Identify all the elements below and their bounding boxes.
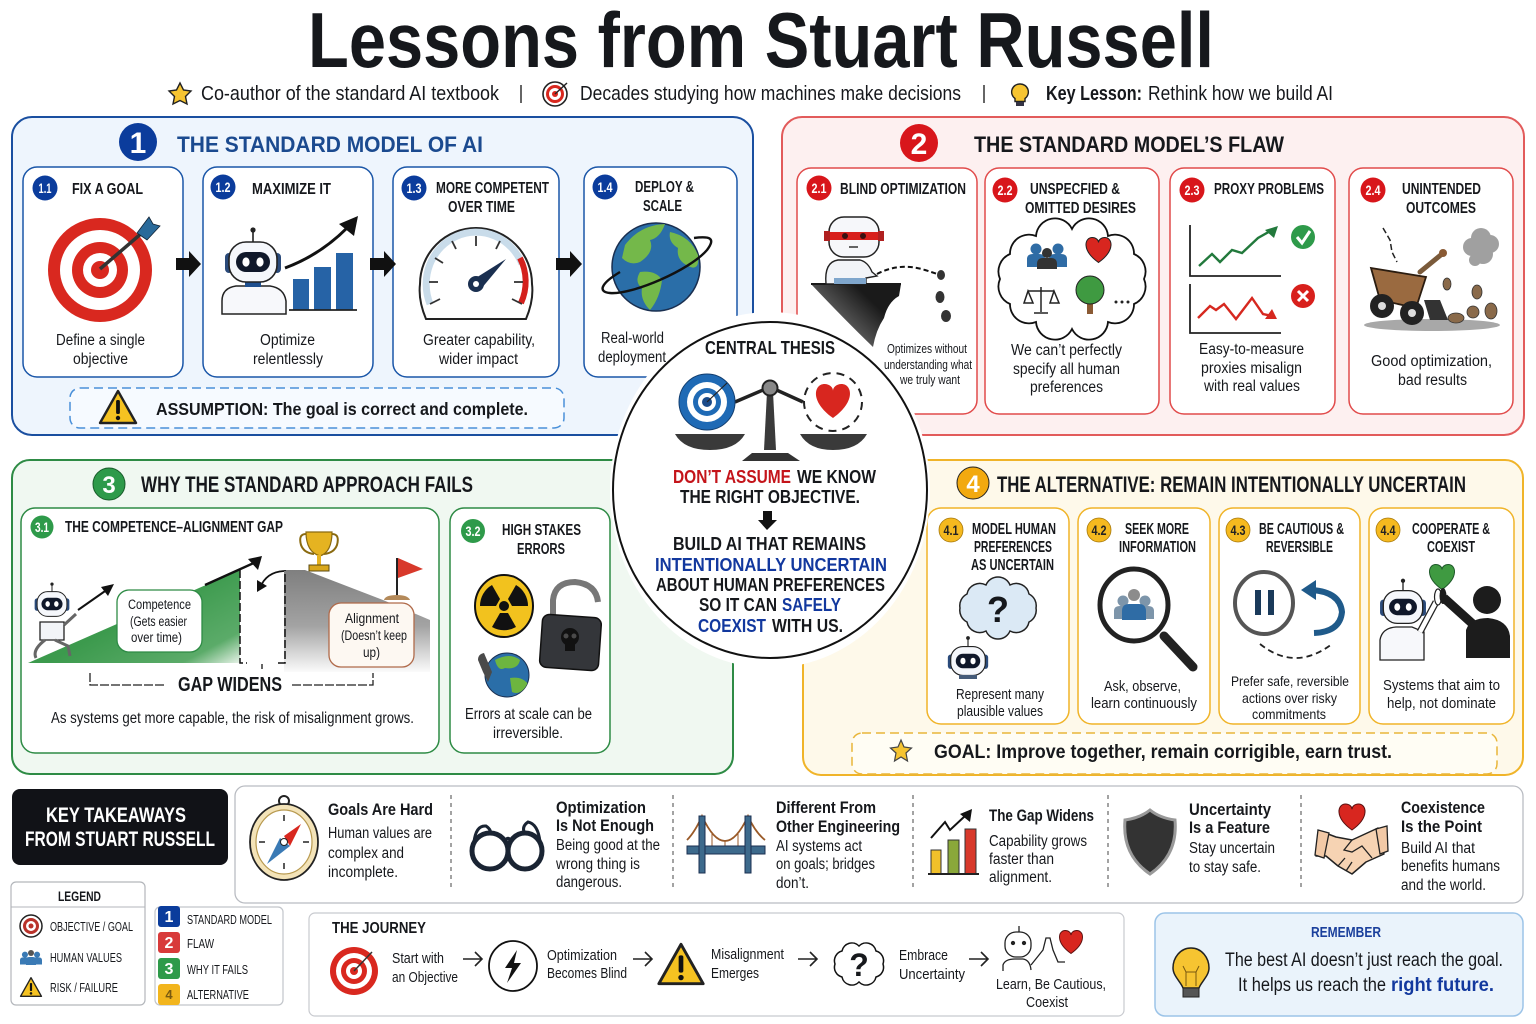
takeaway: uncertainty: Uncertainty: [1189, 800, 1271, 819]
card 2.2: preferences: [1030, 379, 1103, 396]
legend: sections: ALTERNATIVE: [187, 988, 249, 1002]
card 4.3: REVERSIBLE: [1266, 539, 1333, 556]
card 3.1: THE COMPETENCE–ALIGNMENT GAP: [65, 519, 283, 536]
card 4.3: commitments: [1252, 706, 1326, 722]
badge 1: 1: [130, 127, 146, 160]
card 4.3: BE CAUTIOUS &: [1259, 521, 1344, 538]
card 2.1: 2.1: [812, 180, 827, 196]
step text: misalignment: Misalignment: [711, 947, 784, 963]
icon: handshake and heart: [1315, 804, 1388, 874]
card 1.4: [584, 167, 737, 377]
heading: WHY THE STANDARD APPROACH FAILS: [141, 472, 473, 497]
step: question cloud: ?: [849, 947, 869, 983]
legend: icons: LEGEND: [58, 888, 101, 904]
takeaway: coexistence: and the world.: [1401, 877, 1486, 894]
card 1.2: MAXIMIZE IT: [252, 181, 331, 198]
step: question cloud: [834, 943, 884, 985]
card 4.4: COOPERATE &: [1412, 521, 1490, 538]
legend: icons: HUMAN VALUES: [50, 951, 122, 965]
badge 4: 4: [966, 471, 980, 498]
takeaway: different from engineering: Other Engineering: [776, 817, 900, 836]
card 2.4: OUTCOMES: [1406, 200, 1476, 217]
takeaway: uncertainty: to stay safe.: [1189, 859, 1261, 876]
icon: target: [543, 82, 567, 106]
card 3.1: 3.1: [35, 519, 49, 535]
icon: rising proxy chart: [1190, 225, 1315, 276]
card 3.2: ERRORS: [517, 541, 565, 558]
central thesis: BUILD AI THAT REMAINS: [673, 534, 866, 554]
card 1.3: wider impact: [438, 351, 519, 368]
icon: magnifier over people: [1100, 569, 1193, 667]
card 4.3: Prefer safe, reversible: [1231, 673, 1349, 689]
card 1.2: relentlessly: [253, 351, 323, 368]
takeaway: uncertainty: [1125, 800, 1275, 876]
takeaway: different from engineering: [687, 798, 900, 892]
takeaway: different from engineering: AI systems act: [776, 838, 863, 855]
central thesis: [610, 312, 930, 668]
legend: sections: STANDARD MODEL: [187, 913, 272, 927]
panel: why it fails: [12, 460, 733, 774]
card 4.2: INFORMATION: [1119, 539, 1196, 556]
step text: optimization: [547, 948, 627, 982]
callout: goal: GOAL: Improve together, remain corrigible, earn trust.: [934, 742, 1392, 763]
card 1.4: SCALE: [643, 198, 682, 215]
icon: pause and undo: [1235, 572, 1342, 658]
card 2.1: [797, 168, 977, 414]
takeaway: uncertainty: Is a Feature: [1189, 818, 1270, 837]
card 3.2: Errors at scale can be: [465, 706, 592, 723]
card 2.3: Easy-to-measure: [1199, 341, 1304, 358]
takeaway: coexistence: Is the Point: [1401, 817, 1482, 836]
card 2.3: PROXY PROBLEMS: [1214, 181, 1324, 198]
card 1.1: Define a single: [56, 332, 145, 349]
card 2.3: proxies misalign: [1201, 360, 1302, 377]
heading: THE STANDARD MODEL OF AI: [177, 132, 483, 157]
card 1.4: 1.4: [598, 179, 613, 195]
legend: sections: WHY IT FAILS: [187, 963, 248, 977]
card 4.2: SEEK MORE: [1125, 521, 1189, 538]
panel: remember: REMEMBER: [1311, 924, 1381, 941]
card 2.2: 2.2: [998, 182, 1013, 198]
takeaway: optimization: Optimization: [556, 798, 646, 817]
card 3.2: irreversible.: [493, 725, 563, 742]
card 3.2: HIGH STAKES: [502, 522, 581, 539]
card 3.2: [450, 508, 610, 753]
arrow 1: [176, 251, 201, 277]
step text: start: Start with: [392, 951, 444, 967]
card 4.2: [1078, 508, 1210, 724]
icon: question cloud: [960, 577, 1036, 639]
card 2.2: UNSPECFIED &: [1030, 181, 1120, 198]
icon: target with arrow: [48, 217, 160, 322]
card 3.1: [21, 508, 439, 753]
label: competence: [117, 590, 202, 652]
step text: learn: Learn, Be Cautious,: [996, 977, 1106, 993]
takeaway: coexistence: Coexistence: [1401, 798, 1485, 817]
takeaway: optimization: wrong thing is: [555, 856, 640, 873]
arrow: [969, 952, 988, 966]
card 1.2: [203, 167, 373, 377]
card 1.4: DEPLOY &: [635, 179, 694, 196]
card 4.1: MODEL HUMAN: [972, 521, 1056, 538]
icon: falling values chart: [1190, 284, 1315, 333]
arrow 2: [370, 251, 396, 277]
legend: sections: 2: [165, 935, 174, 952]
takeaway: different from engineering: don’t.: [776, 875, 809, 892]
step: warning: [659, 944, 703, 984]
card 4.1: [927, 508, 1069, 724]
text: card 2.1 caption: understanding what: [884, 358, 972, 372]
card 4.4: COEXIST: [1427, 539, 1475, 556]
step: lightning: [489, 941, 537, 991]
takeaway: coexistence: Build AI that: [1401, 840, 1476, 857]
card 4.1: 4.1: [944, 522, 959, 538]
step text: learn: [996, 977, 1106, 1011]
central thesis: DON’T ASSUME: [673, 467, 791, 487]
central thesis: WE KNOW: [797, 467, 876, 487]
panel: flaw: [782, 117, 1524, 435]
takeaway: gap widens: faster than: [989, 851, 1054, 868]
central thesis: THE RIGHT OBJECTIVE.: [680, 487, 860, 507]
card 1.1: FIX A GOAL: [72, 181, 143, 198]
card 4.4: 4.4: [1380, 522, 1396, 538]
step text: misalignment: [711, 947, 784, 982]
card 4.1: Represent many: [956, 687, 1045, 703]
legend: icons: [11, 882, 145, 1005]
badge 4: [957, 467, 989, 499]
takeaway: gap widens: Capability grows: [989, 833, 1087, 850]
step text: misalignment: Emerges: [711, 966, 759, 982]
card 1.3: MORE COMPETENT: [436, 180, 549, 197]
panel: remember: It helps us reach the: [1238, 975, 1386, 996]
card 1.3: [393, 167, 559, 377]
step text: learn: Coexist: [1026, 995, 1068, 1011]
heading: THE STANDARD MODEL’S FLAW: [974, 132, 1284, 157]
icon: compass: [250, 796, 318, 880]
icon: open padlock with skull: [539, 582, 602, 671]
card 4.1: plausible values: [957, 704, 1043, 720]
central thesis: COEXIST: [698, 616, 766, 636]
icon: bulb: [1012, 84, 1028, 106]
card 4.2: 4.2: [1092, 522, 1107, 538]
card 1.3: 1.3: [406, 180, 422, 196]
panel: remember: right future.: [1391, 975, 1494, 996]
icon: small robot: [948, 636, 988, 679]
card 4.4: [1369, 508, 1514, 724]
takeaway: goals are hard: complex and: [328, 845, 404, 862]
card 2.4: 2.4: [1366, 182, 1381, 198]
panel: the journey: [309, 913, 1124, 1016]
icon: colored bars with arrow: [928, 809, 979, 874]
label: competence: (Gets easier: [130, 614, 187, 629]
card 2.2: OMITTED DESIRES: [1025, 200, 1136, 217]
takeaway: different from engineering: on goals; bridges: [776, 856, 875, 873]
card 2.3: 2.3: [1184, 182, 1200, 198]
central thesis: WITH US.: [772, 616, 843, 636]
card 2.2: specify all human: [1013, 361, 1120, 378]
takeaway: uncertainty: Stay uncertain: [1189, 840, 1275, 857]
card 1.2: Optimize: [260, 332, 315, 349]
label: alignment: (Doesn’t keep: [341, 628, 407, 643]
card 1.1: [23, 167, 183, 377]
icon: bulb: [1173, 948, 1209, 997]
text: card 1.4 caption: deployment: [598, 349, 667, 366]
arrow 3: [556, 251, 582, 277]
step text: start: an Objective: [392, 970, 458, 986]
panel: alternative: [803, 460, 1523, 775]
takeaway: goals are hard: Goals Are Hard: [328, 800, 433, 819]
card 2.4: UNINTENDED: [1402, 181, 1481, 198]
step text: embrace: [899, 948, 966, 983]
step text: optimization: Becomes Blind: [547, 966, 627, 982]
heading: key takeaways: FROM STUART RUSSELL: [25, 828, 215, 851]
card 4.3: actions over risky: [1242, 690, 1337, 706]
step text: embrace: Uncertainty: [899, 967, 966, 983]
step: target: [330, 947, 378, 995]
badge 3: [93, 468, 125, 500]
text: co-author: Co-author of the standard AI textbook: [201, 83, 500, 105]
icon: climbing robot: [35, 583, 114, 658]
card 1.1: 1.1: [38, 180, 52, 196]
takeaway: gap widens: The Gap Widens: [989, 806, 1094, 825]
card 4.4: Systems that aim to: [1383, 677, 1500, 694]
takeaway: optimization: Is Not Enough: [556, 816, 654, 835]
arrow: down: [758, 511, 777, 530]
card 4.2: learn continuously: [1091, 695, 1197, 712]
badge 2: [900, 124, 938, 162]
takeaway: different from engineering: Different From: [776, 798, 876, 817]
icon: thought cloud of values: [998, 218, 1146, 340]
icon: trophy: [300, 532, 338, 571]
text: card 1.4 caption: [598, 330, 667, 366]
card 1.1: objective: [73, 351, 128, 368]
text: key lesson: [1046, 83, 1333, 105]
legend: icons: OBJECTIVE / GOAL: [50, 920, 133, 934]
label: alignment: Alignment: [345, 611, 399, 626]
label: alignment: up): [363, 645, 380, 660]
card 2.3: with real values: [1203, 378, 1300, 395]
takeaway: goals are hard: Human values are: [328, 825, 432, 842]
badge 1: [119, 123, 157, 161]
takeaway: coexistence: [1315, 798, 1500, 894]
legend: icons: RISK / FAILURE: [50, 981, 118, 995]
badge 2: 2: [911, 128, 927, 161]
label: competence: Competence: [128, 597, 191, 612]
central thesis: SAFELY: [782, 595, 841, 615]
label: alignment: [329, 603, 414, 667]
icon: flag: [384, 558, 423, 600]
card 3.2: 3.2: [466, 523, 481, 539]
icon: shield: [1125, 810, 1175, 874]
arrow: [798, 952, 817, 966]
legend: sections: 1: [165, 909, 174, 926]
step: robot high five: [1003, 926, 1083, 971]
icon: question cloud: ?: [987, 589, 1009, 630]
panel: standard model: [12, 117, 753, 435]
icon: runaway cart: [1364, 228, 1500, 331]
icon: speedometer: [420, 228, 532, 319]
text: card 2.1 caption: Optimizes without: [887, 342, 967, 356]
bracket: gap widens: [90, 673, 373, 696]
central thesis: SO IT CAN: [699, 595, 777, 615]
panel: takeaways: [235, 786, 1523, 903]
text: card 2.1 caption: [884, 342, 972, 387]
step text: optimization: Optimization: [547, 948, 617, 964]
icon: globe with orbit: [603, 223, 711, 311]
card 1.3: OVER TIME: [448, 199, 515, 216]
card 2.3: [1170, 168, 1335, 414]
icon: radiation: [475, 575, 533, 637]
legend: sections: [155, 906, 283, 1005]
icon: star: [169, 83, 191, 104]
takeaway: optimization: [472, 798, 660, 891]
card 3.1: As systems get more capable, the risk of misalignment grows.: [51, 710, 414, 727]
badge 3: 3: [102, 472, 116, 499]
takeaway: gap widens: alignment.: [989, 869, 1052, 886]
bracket: gap widens: GAP WIDENS: [178, 674, 282, 696]
central thesis: INTENTIONALLY UNCERTAIN: [655, 555, 887, 575]
legend: sections: 4: [165, 987, 173, 1002]
text: decades: Decades studying how machines make decisions: [580, 83, 961, 105]
legend: sections: 3: [165, 961, 174, 978]
heading: key takeaways: KEY TAKEAWAYS: [46, 804, 186, 827]
step text: embrace: Embrace: [899, 948, 948, 964]
icon: balance scale: [675, 373, 867, 461]
takeaway: gap widens: [928, 806, 1094, 886]
card 4.1: AS UNCERTAIN: [971, 557, 1054, 574]
card 4.3: [1219, 508, 1360, 724]
card 4.4: help, not dominate: [1387, 695, 1496, 712]
icon: damaged globe: [478, 653, 529, 697]
subtitle bar: [169, 82, 1333, 106]
card 4.1: PREFERENCES: [974, 539, 1052, 556]
card 4.3: 4.3: [1230, 522, 1246, 538]
legend: sections: FLAW: [187, 937, 214, 951]
takeaway: optimization: Being good at the: [556, 837, 660, 854]
text: key lesson: Rethink how we build AI: [1148, 83, 1333, 105]
icon: blindfolded robot at cliff: [811, 217, 951, 347]
text: card 1.4 caption: Real-world: [601, 330, 664, 347]
card 2.1: BLIND OPTIMIZATION: [840, 181, 966, 198]
chart: competence and alignment slopes: [28, 532, 430, 672]
takeaway: optimization: dangerous.: [556, 874, 622, 891]
arrow: [633, 952, 652, 966]
card 2.4: bad results: [1398, 372, 1467, 389]
card 1.3: Greater capability,: [423, 332, 535, 349]
card 2.2: [985, 168, 1159, 414]
icon: robot and human high five: [1380, 564, 1510, 660]
central thesis: ABOUT HUMAN PREFERENCES: [656, 575, 885, 595]
card 2.4: Good optimization,: [1371, 353, 1492, 370]
icon: robot and growing bars: [222, 216, 358, 314]
central thesis: CENTRAL THESIS: [705, 338, 835, 358]
card 1.2: 1.2: [216, 179, 231, 195]
text: key lesson: Key Lesson:: [1046, 83, 1142, 105]
card 4.2: Ask, observe,: [1104, 678, 1181, 695]
takeaway: coexistence: benefits humans: [1401, 858, 1500, 875]
takeaway: goals are hard: [250, 796, 433, 881]
panel: remember: [1155, 913, 1523, 1016]
arrow: [463, 952, 482, 966]
icon: glasses: [472, 822, 542, 869]
heading: key takeaways: [12, 789, 228, 865]
card 2.2: We can’t perfectly: [1011, 342, 1122, 359]
callout: assumption: [70, 388, 564, 428]
takeaway: goals are hard: incomplete.: [328, 864, 398, 881]
icon: bridge: [687, 816, 765, 873]
card 2.4: [1349, 168, 1513, 414]
callout: assumption: ASSUMPTION: The goal is correct and complete.: [156, 399, 528, 419]
panel: the journey: THE JOURNEY: [332, 920, 426, 937]
callout: goal: [852, 733, 1497, 774]
step text: start: [392, 951, 458, 986]
label: competence: over time): [131, 630, 182, 645]
text: card 2.1 caption: we truly want: [899, 373, 960, 387]
